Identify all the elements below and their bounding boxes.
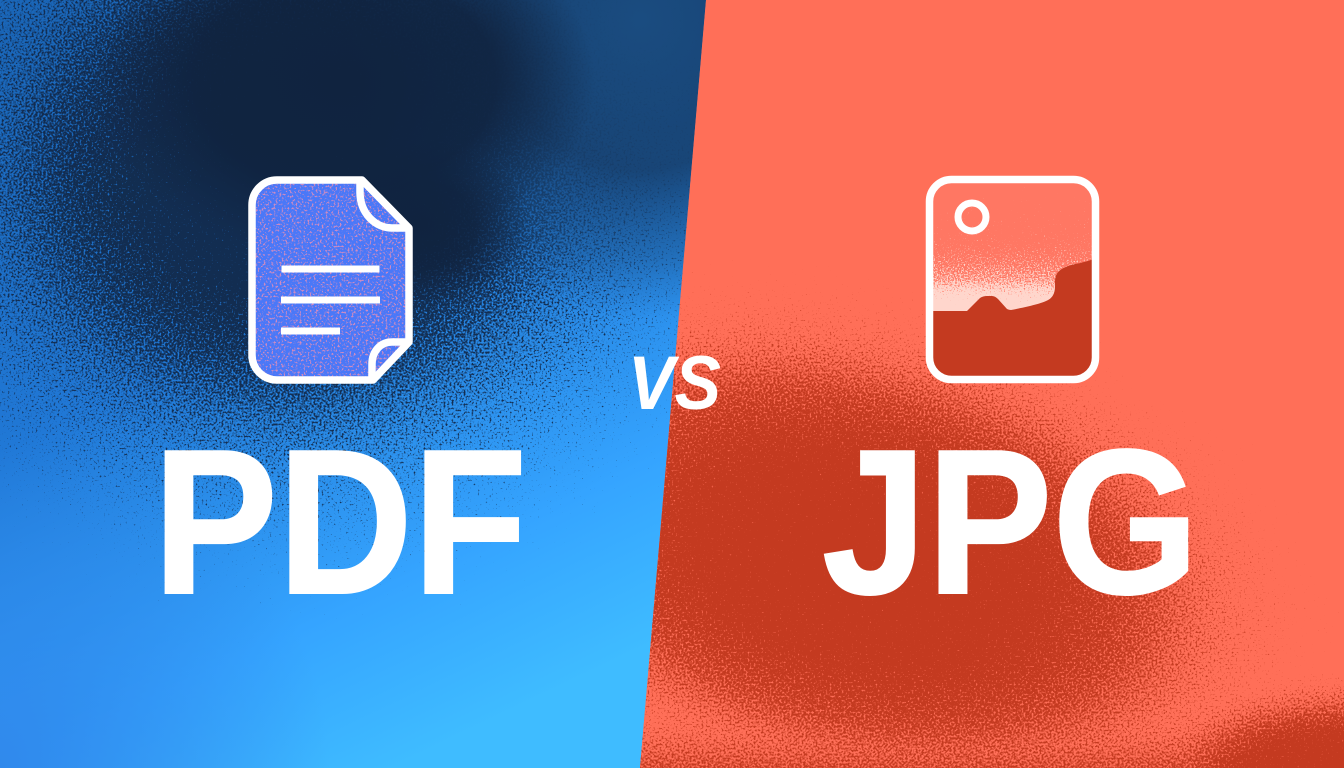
icon: PDF document (245, 175, 415, 385)
label: VS: VS (628, 341, 721, 426)
heading: PDF: PDF (153, 407, 527, 637)
icon: JPG image (925, 175, 1100, 385)
panel: PDF blue grainy background (0, 0, 720, 768)
heading: JPG: JPG (822, 407, 1199, 637)
panel: JPG coral grainy background (630, 0, 1344, 768)
